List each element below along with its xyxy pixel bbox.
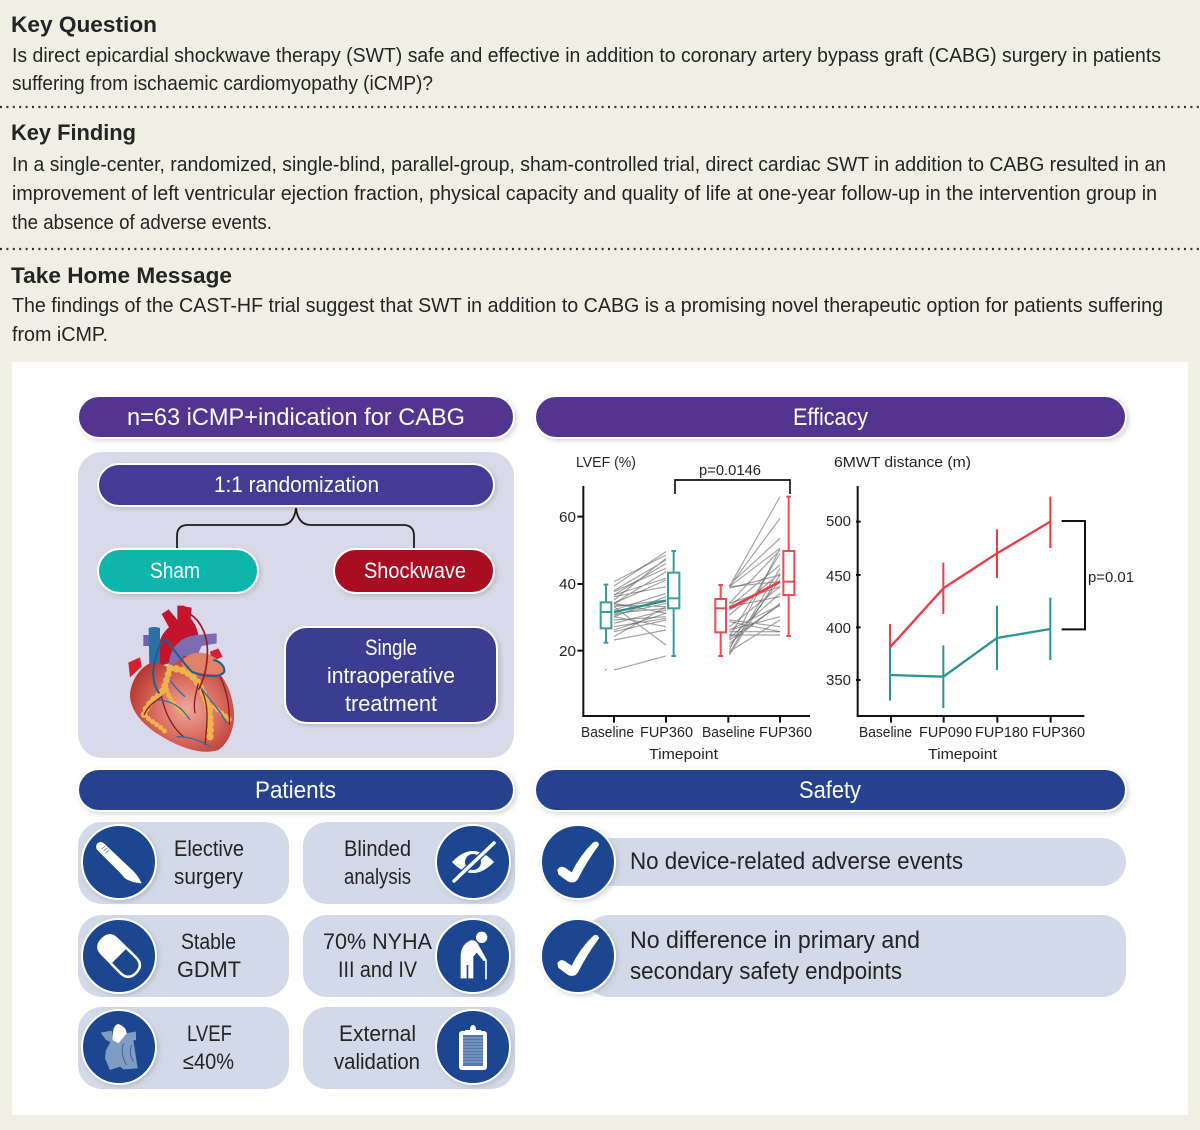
y axis labels: 20 bbox=[559, 644, 576, 660]
text: key question body: Is direct epicardial shockwave therapy (SWT) safe and effective in addition to coronary artery bypass graft (CABG) surgery in patients bbox=[12, 44, 1161, 67]
text: take home message body: The findings of the CAST-HF trial suggest that SWT in addition to CABG is a promising novel therapeutic option for patients suffering bbox=[12, 294, 1163, 317]
card: no difference in safety endpoints: secondary safety endpoints bbox=[630, 958, 902, 985]
panel: key question bbox=[11, 12, 1161, 95]
panel: take home message bbox=[11, 263, 1163, 346]
arm pill: shockwave bbox=[334, 549, 494, 593]
heading pill: population bbox=[78, 396, 514, 438]
card: stable GDMT bbox=[78, 915, 289, 997]
card: LVEF threshold: LVEF bbox=[187, 1021, 232, 1046]
chart title: LVEF: LVEF (%) bbox=[576, 455, 636, 471]
icon: check mark bbox=[541, 825, 615, 899]
x axis labels: Baseline bbox=[702, 725, 755, 741]
card: stable GDMT: GDMT bbox=[177, 957, 241, 982]
annotation: p value: p=0.01 bbox=[1088, 570, 1134, 586]
card: no device-related adverse events bbox=[541, 825, 1126, 899]
icon: check mark bbox=[541, 919, 615, 993]
card: NYHA class bbox=[303, 915, 515, 997]
y axis labels: 500 bbox=[826, 514, 851, 530]
y axis labels: 60 bbox=[559, 510, 576, 526]
card: blinded analysis: analysis bbox=[344, 864, 411, 889]
heading: key finding: Key Finding bbox=[11, 120, 136, 145]
x axis labels: FUP360 bbox=[1032, 725, 1085, 741]
heading pill: patients bbox=[78, 769, 514, 811]
randomization pill: 1:1 randomization bbox=[214, 472, 379, 497]
x axis labels bbox=[581, 725, 812, 763]
x axis labels: FUP090 bbox=[919, 725, 972, 741]
panel: white graphical abstract bbox=[12, 362, 1188, 1115]
chart: 6MWT line chart bbox=[826, 455, 1134, 763]
x axis labels: FUP360 bbox=[759, 725, 812, 741]
x axis labels bbox=[859, 725, 1085, 763]
icon: scalpel bbox=[82, 825, 156, 899]
chart: LVEF box plot bbox=[559, 455, 812, 763]
card: NYHA class: 70% NYHA bbox=[323, 929, 432, 954]
card: blinded analysis: Blinded bbox=[344, 836, 411, 861]
icon: elderly person with cane bbox=[436, 919, 510, 993]
card: NYHA class: III and IV bbox=[338, 957, 417, 982]
heading pill: safety: Safety bbox=[799, 777, 861, 804]
arm pill: sham bbox=[98, 549, 258, 593]
plot: 6MWT data bbox=[856, 486, 1085, 723]
card: external validation: validation bbox=[334, 1049, 420, 1074]
card: external validation: External bbox=[339, 1021, 416, 1046]
text: key finding body bbox=[12, 153, 1166, 234]
y axis labels: 40 bbox=[559, 577, 576, 593]
y axis labels bbox=[559, 510, 576, 660]
x axis labels: Timepoint bbox=[649, 747, 718, 763]
box: single intraoperative treatment: intraoperative bbox=[327, 663, 455, 688]
card: stable GDMT: Stable bbox=[181, 929, 236, 954]
y axis labels bbox=[826, 514, 851, 689]
card: no device-related adverse events: No device-related adverse events bbox=[630, 848, 963, 875]
card: no difference in safety endpoints: No difference in primary and bbox=[630, 927, 920, 954]
card: elective surgery: Elective bbox=[174, 836, 244, 861]
icon: clipboard bbox=[436, 1010, 510, 1084]
icon: heart bbox=[82, 1010, 156, 1084]
box: single intraoperative treatment: Single bbox=[365, 635, 417, 660]
icon: crossed-out eye bbox=[436, 825, 510, 899]
bracket: randomization split bbox=[177, 508, 414, 548]
card: LVEF threshold: ≤40% bbox=[183, 1049, 234, 1074]
x axis labels: FUP360 bbox=[640, 725, 693, 741]
text: key question body bbox=[12, 44, 1161, 95]
heading pill: patients: Patients bbox=[255, 777, 336, 804]
card: no difference in safety endpoints bbox=[541, 915, 1126, 997]
illustration: anatomical heart bbox=[128, 606, 234, 752]
text: key finding body: In a single-center, randomized, single-blind, parallel-group, sham-controlled trial, direct cardiac SWT in addition to CABG resulted in an bbox=[12, 153, 1166, 176]
text: take home message body bbox=[12, 294, 1163, 346]
randomization pill bbox=[98, 464, 494, 506]
heading pill: efficacy: Efficacy bbox=[793, 404, 868, 431]
arm pill: shockwave: Shockwave bbox=[364, 558, 466, 583]
text: key question body: suffering from ischaemic cardiomyopathy (iCMP)? bbox=[12, 72, 433, 95]
panel: key finding bbox=[11, 120, 1166, 234]
chart title: 6MWT: 6MWT distance (m) bbox=[834, 455, 971, 471]
heading: take home message: Take Home Message bbox=[11, 263, 232, 288]
card: elective surgery bbox=[78, 822, 289, 904]
x axis labels: Timepoint bbox=[928, 747, 997, 763]
x axis labels: Baseline bbox=[581, 725, 634, 741]
x axis labels: FUP180 bbox=[975, 725, 1028, 741]
heading pill: population: n=63 iCMP+indication for CABG bbox=[127, 404, 465, 431]
box: single intraoperative treatment: treatment bbox=[345, 691, 438, 716]
heading pill: efficacy bbox=[535, 396, 1126, 438]
heading: key question: Key Question bbox=[11, 12, 157, 37]
plot: LVEF data bbox=[577, 480, 810, 723]
card: external validation bbox=[303, 1007, 515, 1089]
card: elective surgery: surgery bbox=[174, 864, 244, 889]
arm pill: sham: Sham bbox=[150, 558, 200, 583]
heading pill: safety bbox=[535, 769, 1126, 811]
box: single intraoperative treatment bbox=[285, 627, 497, 723]
icon: capsule bbox=[82, 919, 156, 993]
text: key finding body: improvement of left ventricular ejection fraction, physical capacity and quality of life at one-year follow-up in the intervention group in bbox=[12, 182, 1157, 205]
x axis labels: Baseline bbox=[859, 725, 912, 741]
text: key finding body: the absence of adverse events. bbox=[12, 211, 272, 234]
card: blinded analysis bbox=[303, 822, 515, 904]
card: LVEF threshold bbox=[78, 1007, 289, 1089]
y axis labels: 400 bbox=[826, 621, 851, 637]
panel: randomization bbox=[78, 452, 514, 758]
annotation: p value: p=0.0146 bbox=[699, 463, 761, 479]
y axis labels: 350 bbox=[826, 673, 851, 689]
y axis labels: 450 bbox=[826, 569, 851, 585]
text: take home message body: from iCMP. bbox=[12, 323, 108, 346]
